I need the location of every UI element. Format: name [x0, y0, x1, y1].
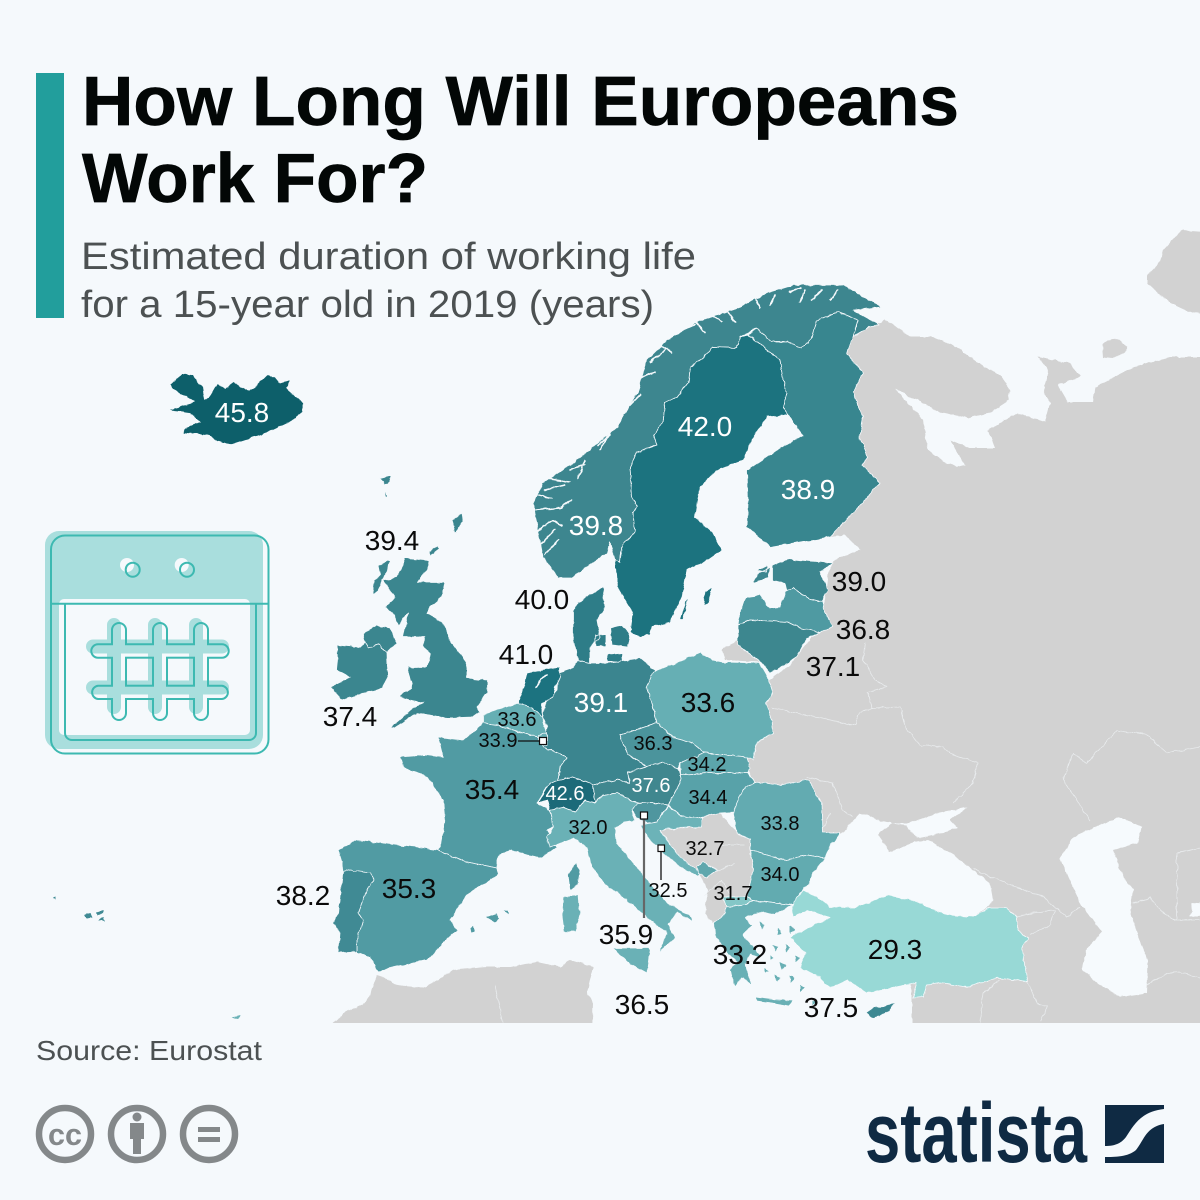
Italy	[547, 793, 692, 953]
Hungary	[668, 773, 755, 818]
data labels: 33.2	[713, 939, 767, 970]
non-data land: North Africa	[320, 960, 593, 1035]
Corsica	[568, 863, 580, 890]
Crete	[755, 997, 793, 1006]
data labels: 33.9	[479, 730, 517, 752]
Sicily	[613, 948, 650, 973]
title: Work For?	[82, 139, 428, 217]
data labels: 32.7	[686, 838, 724, 860]
Norway	[533, 285, 882, 578]
data labels: 34.0	[761, 864, 799, 886]
non-data land: Arctic islands	[1102, 230, 1200, 358]
data labels: 33.8	[761, 813, 799, 835]
Netherlands inlet	[536, 675, 547, 688]
Sardinia	[562, 895, 580, 932]
Romania	[733, 780, 840, 860]
leader line: Croatia	[658, 845, 664, 880]
leader line: Luxembourg	[518, 738, 546, 744]
Luxembourg	[538, 733, 547, 747]
national borders on grey land	[495, 643, 1200, 1023]
data labels: 37.6	[632, 775, 670, 797]
data labels: 39.8	[569, 510, 623, 541]
Switzerland	[538, 777, 595, 812]
data labels: 34.2	[688, 754, 726, 776]
Iceland	[163, 373, 303, 445]
United Kingdom	[383, 558, 487, 728]
Turkey	[790, 890, 1028, 998]
Spain	[338, 840, 498, 972]
title	[82, 62, 959, 217]
Northern Ireland border	[365, 642, 387, 653]
data labels: 42.6	[546, 783, 584, 805]
icon: Creative Commons BY: cc	[48, 1117, 82, 1152]
Finland	[747, 312, 880, 547]
data labels: 37.4	[323, 701, 377, 732]
sea: Caspian Sea	[1060, 817, 1148, 997]
data labels: 33.6	[681, 687, 735, 718]
Croatia	[640, 806, 703, 876]
data labels: 36.8	[836, 614, 890, 645]
Norway fjords	[536, 288, 838, 555]
sea: Aral Sea	[1191, 903, 1200, 917]
title accent bar	[36, 73, 64, 318]
data labels: 32.0	[569, 817, 607, 839]
leader line: Slovenia	[640, 812, 648, 918]
data labels: 41.0	[499, 639, 553, 670]
data labels: 35.3	[382, 873, 436, 904]
data labels: 36.3	[634, 733, 672, 755]
non-data land: Russia and eastern neighbours	[745, 320, 1200, 1035]
Cyprus	[866, 1001, 896, 1018]
non-data land: western Balkans	[660, 813, 753, 923]
Denmark	[573, 587, 630, 663]
data labels: 33.6	[498, 709, 536, 731]
sea: Sea of Azov	[893, 807, 968, 838]
Estonia	[753, 559, 833, 602]
data labels	[215, 397, 922, 1023]
subtitle: Estimated duration of working life	[81, 236, 696, 278]
data labels: 35.9	[599, 919, 653, 950]
subtitle: for a 15-year old in 2019 (years)	[81, 284, 654, 326]
Swedish islands	[680, 587, 713, 620]
France	[400, 723, 567, 868]
data labels: 37.1	[806, 651, 860, 682]
Poland	[647, 653, 773, 760]
Austria	[593, 762, 680, 805]
Lithuania	[738, 620, 820, 673]
Czechia	[620, 723, 705, 768]
Balearic Islands	[470, 910, 510, 933]
data labels: 39.0	[832, 566, 886, 597]
data labels: 40.0	[515, 584, 569, 615]
non-data land: Kaliningrad	[722, 640, 760, 662]
Scottish islands	[372, 475, 463, 595]
icon: calendar	[45, 531, 268, 754]
sea: Black Sea	[825, 814, 994, 916]
Portugal	[333, 870, 375, 953]
Ireland	[330, 625, 397, 700]
Montenegro	[697, 862, 718, 878]
data labels: 29.3	[868, 934, 922, 965]
data labels: 38.2	[276, 880, 330, 911]
Bulgaria	[747, 850, 825, 905]
source: Source: Eurostat	[36, 1035, 262, 1066]
data labels: 39.1	[574, 687, 628, 718]
Netherlands	[518, 667, 560, 717]
data labels: 34.4	[689, 787, 727, 809]
data labels: 31.7	[714, 883, 752, 905]
Azores	[52, 897, 105, 922]
icon: Creative Commons BY	[39, 1108, 235, 1160]
data labels: 39.4	[365, 525, 419, 556]
title: How Long Will Europeans	[82, 62, 959, 140]
Statista logo: statista	[865, 1086, 1088, 1180]
Germany	[542, 658, 657, 785]
North Macedonia	[722, 897, 753, 907]
Malta	[232, 1015, 240, 1019]
Latvia	[738, 588, 833, 633]
data labels: 42.0	[678, 411, 732, 442]
data labels: 32.5	[649, 880, 687, 902]
Slovakia	[680, 753, 750, 775]
data labels: 36.5	[615, 989, 669, 1020]
data labels: 38.9	[781, 474, 835, 505]
Belgium	[483, 703, 547, 737]
Aegean islands	[760, 922, 816, 1005]
Sweden	[615, 335, 788, 637]
Slovenia	[632, 803, 668, 823]
Greece	[714, 900, 793, 987]
data labels: 35.4	[465, 774, 519, 805]
data labels: 45.8	[215, 397, 269, 428]
map of Europe	[52, 230, 1200, 1035]
data labels: 37.5	[804, 992, 858, 1023]
subtitle	[81, 236, 696, 326]
